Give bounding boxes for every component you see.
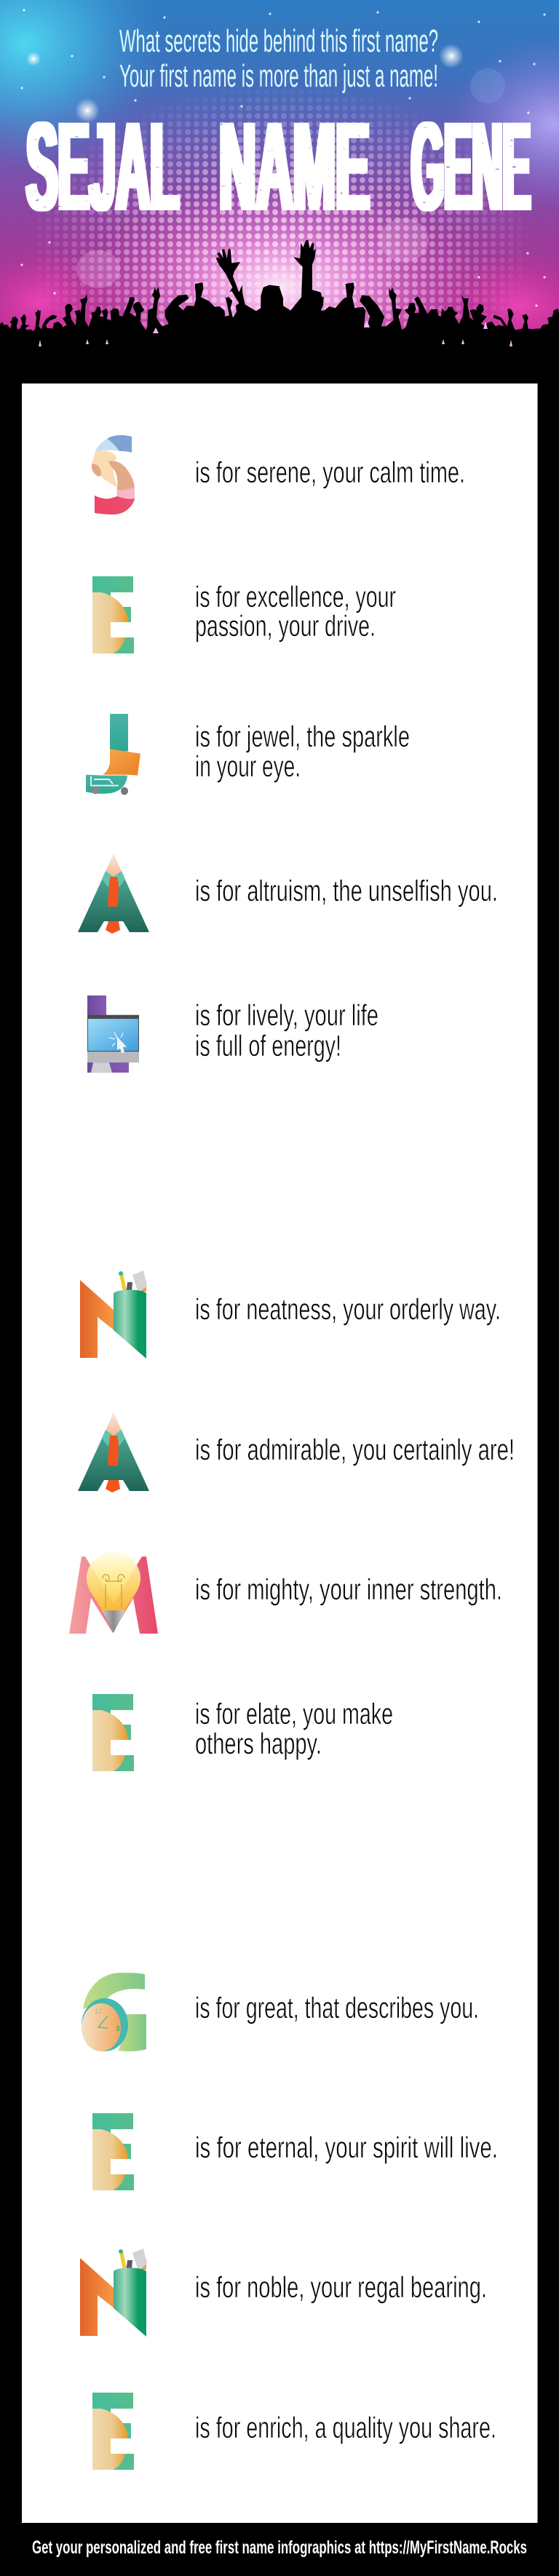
icon: letter M with light bulb [69,1552,158,1634]
text: jewel [195,720,410,783]
white content panel [22,383,537,2523]
icon: letter G with clock [82,1973,146,2051]
text: lively [195,998,378,1062]
subtitle lines [119,23,438,94]
icon: letter G with clock: 12 [95,2008,102,2015]
row: E is for excellence [92,576,396,653]
text: lively: is for lively, your life [195,998,378,1032]
icon: letter G with clock: 3 [116,2025,120,2033]
icon: letter A with tie [78,854,149,934]
text: jewel: is for jewel, the sparkle [195,720,410,753]
crowd silhouette [0,240,559,383]
text: lively: is full of energy! [195,1029,341,1062]
row: S is for serene [92,435,465,514]
title: SEJAL [26,97,179,236]
row: A is for altruism [78,854,498,934]
row: E is for eternal [92,2113,498,2190]
icon: letter N with pen holder [80,2249,147,2337]
text: excellence: is for excellence, your [195,580,396,613]
text: excellence: passion, your drive. [195,609,376,643]
text: elate: is for elate, you make [195,1697,393,1730]
row: J is for jewel [86,714,410,795]
text: jewel: in your eye. [195,750,301,783]
icon: letter S with hands [92,435,135,514]
icon: letter E with planet [92,576,134,653]
row: E is for elate [92,1694,393,1771]
text: elate: others happy. [195,1727,322,1760]
icon: letter J with cart [86,714,140,795]
icon: letter L with monitor [87,995,139,1073]
row: E is for enrich [92,2393,496,2470]
icon: letter E with planet [92,2393,134,2470]
icon: letter E with planet [92,2113,134,2190]
icon: letter A with tie [78,1413,149,1492]
row: N is for neatness [80,1271,501,1359]
row: G is for great [82,1973,479,2051]
text: excellence [195,580,396,643]
header banner background [0,0,559,331]
text: elate [195,1697,393,1760]
row: N is for noble [80,2249,487,2337]
row: M is for mighty [69,1552,502,1634]
row: L is for lively [87,995,378,1073]
row: A is for admirable [78,1413,515,1492]
icon: letter E with planet [92,1694,134,1771]
icon: letter N with pen holder [80,1271,147,1359]
